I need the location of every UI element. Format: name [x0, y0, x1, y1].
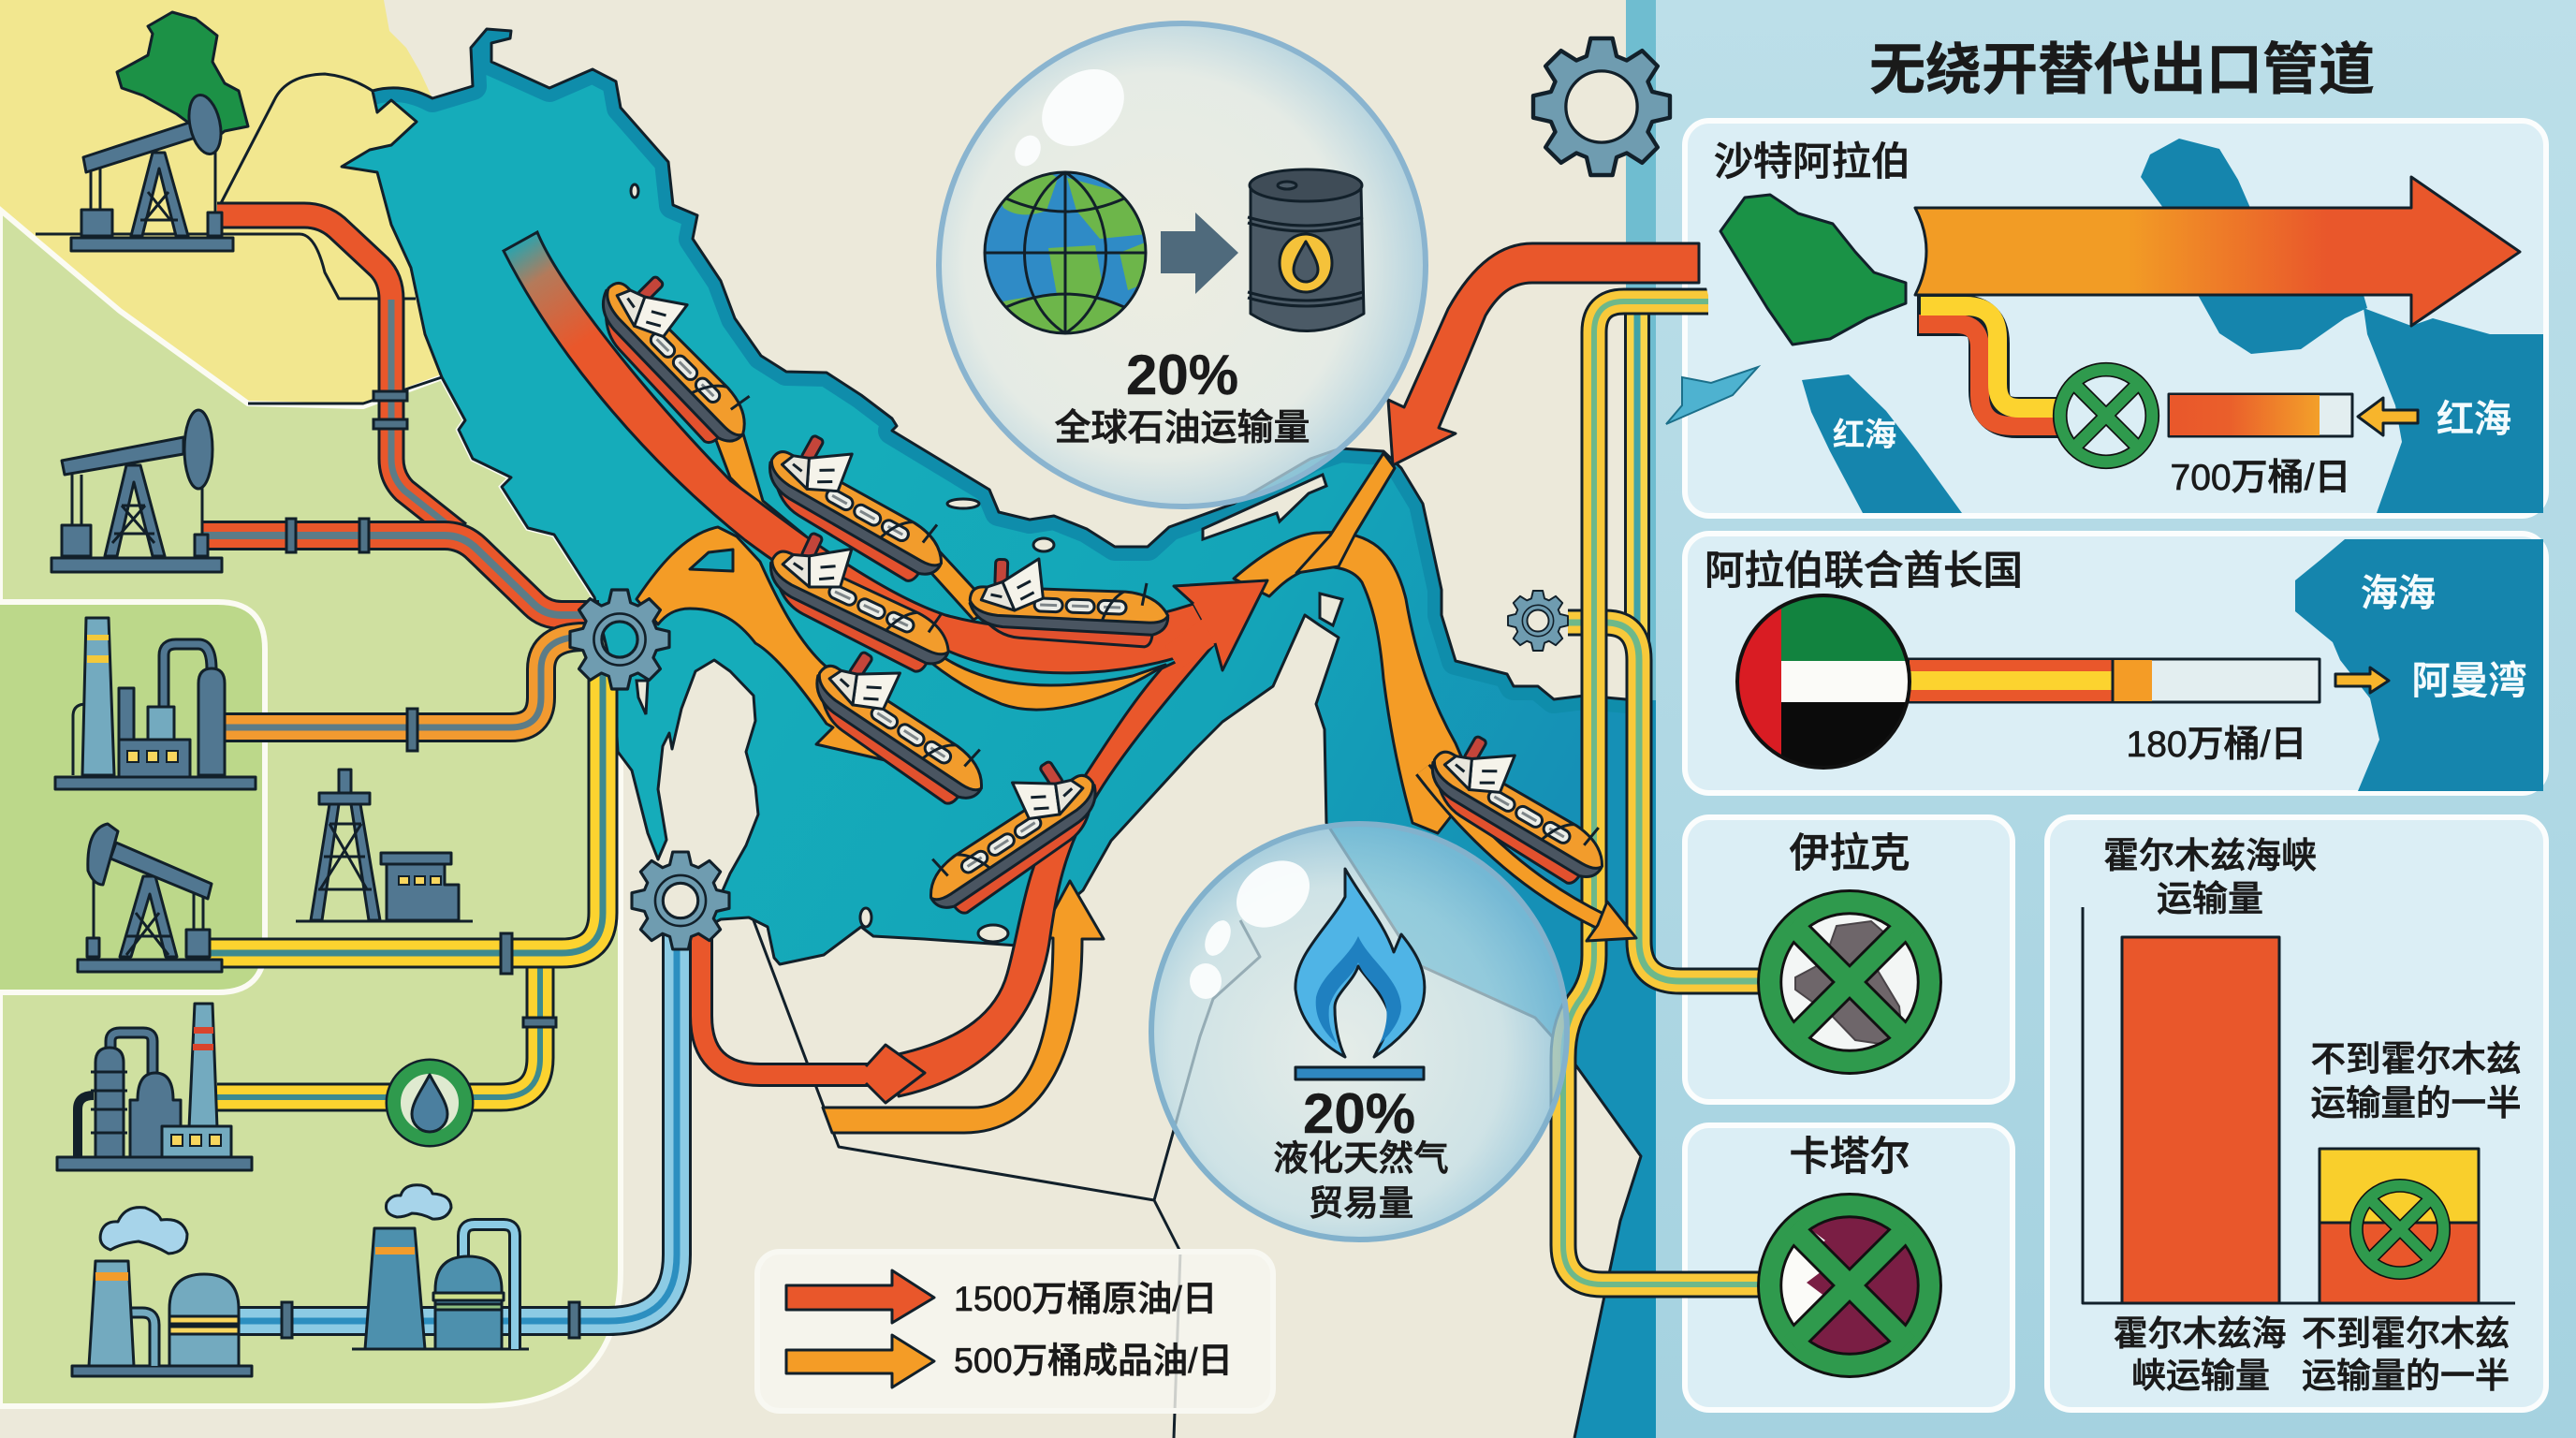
chart title: 霍尔木兹海峡 — [2103, 837, 2317, 876]
pipeline: Saudi to Qatar valve — [1563, 301, 1760, 1284]
icon: pumpjack lower — [78, 824, 222, 972]
pipeline clamp: refinery products — [407, 709, 417, 751]
tanker 5 — [798, 637, 1010, 815]
UAE panel map sea — [2295, 539, 2543, 791]
label: LNG line 1: 液化天然气 — [1273, 1138, 1449, 1178]
label: 7 million barrels: 700万桶/日 — [2171, 458, 2350, 498]
axis label: Hormuz line 2: 峡运输量 — [2131, 1357, 2270, 1395]
stat: 20% LNG: 20% — [1303, 1082, 1415, 1145]
panel: Iraq — [1685, 817, 2012, 1102]
icon: Saudi pumpjack — [51, 410, 222, 572]
bubble: LNG share — [1151, 824, 1567, 1240]
right panel background — [1626, 0, 2576, 1438]
orange flow: strait arc — [1234, 533, 1474, 833]
flame burner bar — [1295, 1067, 1424, 1079]
pipeline: small gear to Iraq valve — [1568, 623, 1760, 981]
icon: valve with oil drop — [387, 1060, 473, 1146]
chart: Hormuz vs bypass capacity — [2083, 837, 2522, 1395]
arrow: to Red Sea — [2358, 398, 2418, 435]
label: sea: 海海 — [2361, 573, 2436, 614]
bubble: global oil share — [939, 23, 1426, 506]
icon: refinery upper — [55, 618, 256, 789]
pipeline: Saudi crude — [201, 536, 599, 615]
axis label: bypass line 2: 运输量的一半 — [2302, 1357, 2510, 1395]
map: Saudi Arabia — [1720, 195, 1906, 345]
label: global oil: 全球石油运输量 — [1054, 408, 1310, 448]
heading: UAE: 阿拉伯联合酋长国 — [1705, 550, 2023, 594]
icon: derrick with building — [296, 770, 473, 921]
legend arrow: crude — [786, 1270, 934, 1323]
orange arrow: exit to Gulf of Oman — [1423, 770, 1636, 941]
Saudi land region — [0, 210, 621, 1406]
icon: gas flame — [1295, 869, 1425, 1057]
label: Red Sea west: 红海 — [1833, 418, 1896, 453]
big arrow: East-West pipeline capacity — [1915, 177, 2520, 326]
legend text: crude: 1500万桶原油/日 — [954, 1279, 1217, 1318]
heading: Iraq: 伊拉克 — [1790, 831, 1910, 876]
pipeline clamps: yellow — [501, 933, 556, 1027]
axis label: Hormuz: 霍尔木兹海 — [2114, 1314, 2286, 1353]
panel: UAE — [1685, 534, 2546, 793]
label: Gulf of Oman: 阿曼湾 — [2411, 659, 2527, 702]
gear large top — [1533, 38, 1670, 175]
pipeline: right vertical from Saudi to UAE gear — [1624, 314, 1650, 646]
gear small near UAE — [1508, 591, 1568, 651]
pipeline clamps: Iraq crude — [373, 391, 407, 429]
blocked Iraq route — [1770, 902, 1929, 1062]
capacity bar: UAE 1.8 million — [1909, 659, 2320, 702]
title: 无绕开替代出口管道 — [1869, 38, 2375, 101]
red arrow: lower band up to Hormuz — [899, 643, 1215, 1096]
Kuwait / UAE panel region — [0, 602, 265, 992]
label: LNG line 2: 贸易量 — [1309, 1183, 1413, 1223]
orange flow: up to Hormuz arrow — [1296, 453, 1395, 573]
capacity bar: Saudi 7 million — [2169, 394, 2352, 436]
annotation line 2: 运输量的一半 — [2310, 1083, 2522, 1123]
legend — [757, 1252, 1273, 1411]
pipeline: yellow main — [211, 674, 603, 953]
red arrow head at Hormuz — [1165, 580, 1267, 670]
annotation: less than half: 不到霍尔木兹 — [2310, 1039, 2522, 1078]
tanker 6 — [902, 746, 1115, 925]
arrow: to Gulf of Oman — [2335, 668, 2389, 693]
pipeline: Iraq crude — [217, 215, 459, 534]
chart axes — [2083, 907, 2515, 1303]
Iraq land region — [0, 0, 468, 406]
tanker 3 — [969, 556, 1170, 648]
orange arrow: from south up — [823, 881, 1104, 1133]
bar: Hormuz — [2122, 937, 2279, 1303]
pipeline: gas blue — [234, 927, 677, 1321]
valve: Saudi pipeline — [2060, 370, 2152, 462]
red arrow: Saudi flow to Hormuz — [1388, 243, 1699, 465]
tanker 1 — [580, 257, 780, 457]
red arrow: from gear to south — [701, 932, 925, 1103]
arrow: globe to barrel — [1161, 213, 1238, 294]
blocked Qatar route — [1760, 1198, 1938, 1376]
icon: oil barrel — [1248, 169, 1364, 331]
orange flow: gear branches to arrow — [637, 527, 889, 761]
tanker 7 — [1414, 722, 1629, 894]
icon: power plant left — [72, 1208, 252, 1376]
islands — [631, 184, 1342, 942]
bar: bypass — [2320, 1149, 2479, 1303]
label: 1.8 million barrels: 180万桶/日 — [2127, 725, 2306, 765]
label: Red Sea east: 红海 — [2437, 399, 2511, 440]
pipeline clamps: Saudi crude — [286, 519, 369, 552]
country borders — [36, 74, 1260, 1438]
icon: power plant right — [352, 1185, 529, 1349]
legend arrow: products — [786, 1335, 934, 1387]
heading: Qatar: 卡塔尔 — [1790, 1135, 1910, 1180]
UAE flag — [1737, 595, 1910, 768]
tanker 2 — [753, 421, 967, 592]
sliver of sea — [1666, 367, 1758, 424]
heading: Saudi Arabia: 沙特阿拉伯 — [1714, 139, 1910, 183]
tanker 4 — [755, 521, 971, 681]
gear hub left — [570, 590, 669, 689]
panel: volume chart — [2047, 817, 2546, 1410]
gear hub lower — [632, 852, 729, 949]
red arrow: main gulf flow — [504, 232, 1215, 673]
map icon: Iraq — [117, 12, 248, 143]
sea: Persian Gulf and Gulf of Oman — [342, 29, 1656, 1438]
chart title line 2: 运输量 — [2157, 880, 2263, 919]
pipeline: Saudi to Red Sea — [1917, 306, 2059, 426]
icon: Iraq pumpjack — [71, 92, 233, 251]
panel: Saudi Arabia — [1685, 121, 2546, 516]
pipeline: refinery products — [225, 637, 585, 727]
legend text: products: 500万桶成品油/日 — [954, 1341, 1233, 1380]
stat: 20% oil: 20% — [1126, 344, 1238, 406]
orange flow: behind ships — [714, 431, 1165, 710]
icon: globe — [985, 169, 1151, 346]
pipeline clamps: gas — [282, 1302, 579, 1338]
axis label: bypass: 不到霍尔木兹 — [2302, 1314, 2510, 1353]
Saudi panel map sea — [1802, 139, 2543, 513]
pipeline: yellow branch from refinery — [217, 964, 540, 1097]
panel: Qatar — [1685, 1125, 2012, 1410]
icon: refinery lower — [57, 1004, 252, 1170]
Saudi halo — [1705, 156, 1925, 377]
